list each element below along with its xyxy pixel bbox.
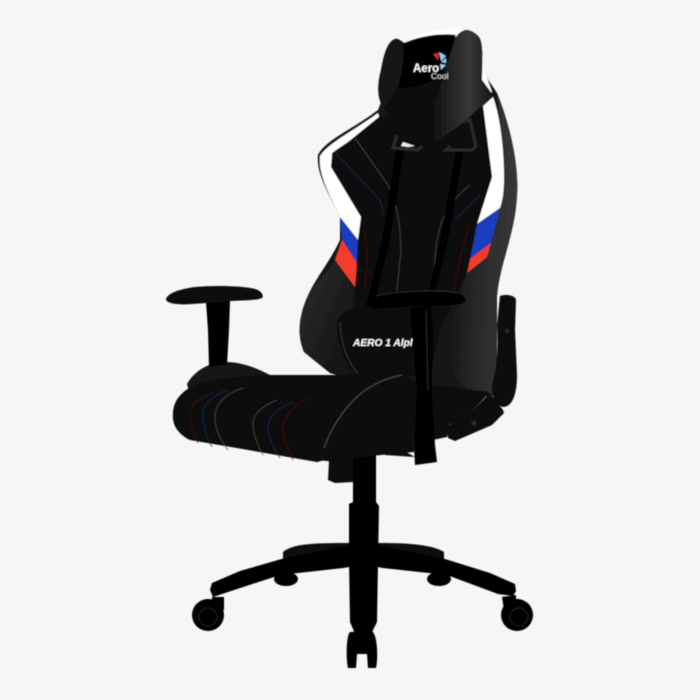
- logo fan icon: [433, 52, 446, 70]
- headrest: [378, 30, 493, 145]
- right caster wheel: [501, 595, 533, 631]
- right arm post: [410, 306, 437, 465]
- logo word Aero: Aero: [413, 63, 439, 75]
- backrest shell: [300, 28, 517, 398]
- harness slot brackets: [393, 120, 476, 150]
- headrest logo panel: [398, 34, 456, 88]
- front caster: [347, 631, 377, 668]
- right white stripe: [477, 97, 504, 224]
- harness slot straps: [366, 150, 464, 306]
- pivot: [472, 420, 476, 426]
- harness slot highlights: [401, 142, 415, 147]
- left caster wheel: [192, 597, 224, 631]
- pillow edge highlight: [340, 322, 358, 374]
- star base: [192, 455, 533, 668]
- seat tilt knob: [328, 458, 353, 483]
- bolster highlight: [324, 375, 402, 448]
- arm pad highlight: [376, 291, 458, 296]
- left arm pad: [166, 286, 263, 304]
- left arm post: [206, 300, 230, 367]
- seat back bump: [187, 362, 272, 395]
- chair: [166, 28, 533, 668]
- seat stitching: [190, 388, 310, 460]
- left red stripe: [335, 240, 357, 287]
- side recline bracket: [447, 295, 517, 441]
- rear legs: [283, 543, 444, 560]
- fabric centre panel: [331, 106, 492, 340]
- pillow body: [337, 306, 446, 376]
- right red stripe: [467, 243, 491, 273]
- logo word Cool: Cool: [431, 71, 449, 81]
- small rear casters: [274, 572, 451, 586]
- AeroCool logo: [413, 52, 449, 81]
- backrest: [300, 28, 517, 398]
- seat frame rear: [385, 380, 490, 457]
- lumbar pillow: [337, 306, 446, 376]
- headrest carbon horn: [433, 30, 493, 142]
- pillow label: AERO 1 Alpl: [352, 338, 413, 349]
- left armrest: [166, 286, 263, 367]
- right blue stripe: [470, 208, 500, 259]
- left carbon side: [300, 260, 353, 376]
- arm post highlight: [426, 310, 428, 390]
- gas lift: [353, 455, 376, 507]
- stitching: [335, 138, 480, 300]
- bracket bolt: [505, 329, 509, 333]
- seat side bolster: [318, 375, 414, 462]
- left carbon weave: [300, 260, 353, 376]
- left white stripe: [320, 113, 380, 240]
- lower bracket plate: [447, 393, 504, 441]
- seat cushion: [173, 375, 345, 462]
- headrest body: [378, 30, 493, 145]
- right carbon weave: [450, 93, 517, 395]
- upper bracket plate: [492, 295, 517, 407]
- white top band: [404, 28, 492, 108]
- right carbon side: [450, 93, 517, 395]
- right armrest: [368, 290, 466, 465]
- lift sleeve and front leg: [349, 502, 379, 636]
- seat: [173, 362, 490, 462]
- right leg: [372, 545, 516, 596]
- headrest carbon left: [378, 39, 403, 108]
- left blue stripe: [340, 217, 358, 263]
- right arm pad: [368, 290, 466, 308]
- left leg: [210, 545, 355, 597]
